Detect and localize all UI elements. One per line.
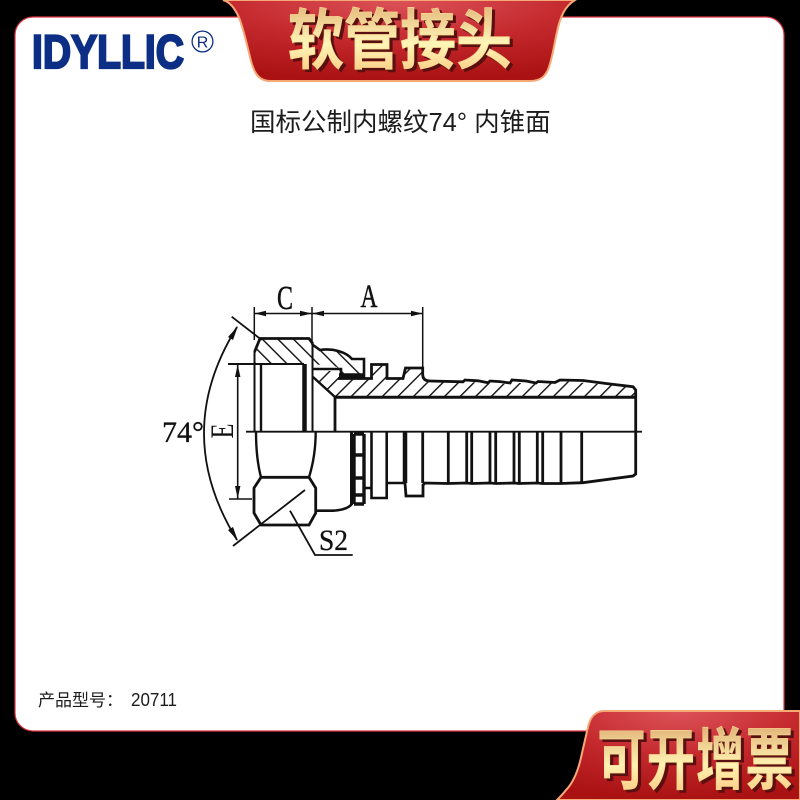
label: 74 degrees: 74° <box>162 416 204 449</box>
dimension: 74 degree arc <box>204 317 305 546</box>
badge shadow: 可开增票 <box>600 726 796 800</box>
hatched section: nut <box>254 338 313 364</box>
outline: hex nut <box>228 363 304 365</box>
hatched section: sleeve <box>313 345 364 377</box>
title text: 软管接头 <box>288 4 512 77</box>
outline: lower half details <box>316 498 353 511</box>
dimension: C and A <box>254 307 423 378</box>
technical drawing: hose fitting <box>204 307 642 555</box>
label: E: E <box>205 424 241 438</box>
label: A: A <box>360 279 378 315</box>
center line <box>246 431 642 433</box>
logo: IDYLLIC: R <box>197 34 208 52</box>
title shadow: 软管接头 <box>291 6 515 79</box>
banner: invoice badge <box>557 711 800 800</box>
badge text: 可开增票 <box>598 724 794 798</box>
hatched section: stem wall <box>313 364 636 397</box>
dimension: E <box>229 364 252 499</box>
subtitle: 国标公制内螺纹74° 内锥面 <box>250 109 551 137</box>
outline: barbed stem top <box>405 380 636 496</box>
outline: sleeve and collar <box>312 345 364 377</box>
banner: top title <box>223 0 575 81</box>
product model: 产品型号： <box>38 691 123 710</box>
product model: 20711 <box>131 690 177 710</box>
label: C: C <box>277 280 293 317</box>
label: S2: S2 <box>319 524 348 557</box>
leader: S2 <box>290 511 353 555</box>
logo: IDYLLIC: IDYLLIC <box>32 25 184 78</box>
